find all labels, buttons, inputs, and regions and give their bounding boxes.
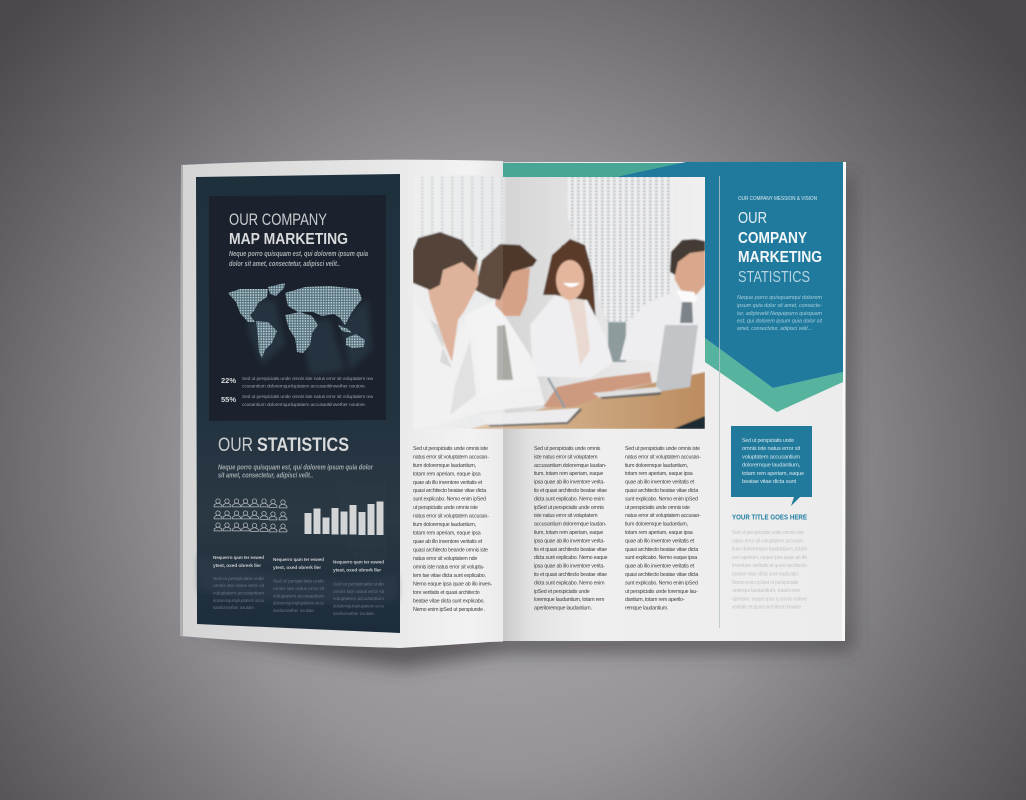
clipboard	[478, 408, 580, 425]
column 1: voluptatem accusantium	[213, 590, 264, 596]
text block: side column: Nemo enim ipSed ut perspiciatis	[732, 580, 799, 586]
column 1: santiumwther oxutate.	[213, 605, 255, 610]
map intro text: Neque porro quisquam est, qui dolorem ipsum quia	[229, 251, 368, 258]
stat: 55%	[221, 394, 374, 407]
text block: left column: tium doloremque laudantium,	[413, 463, 476, 469]
heading: our statistics: STATISTICS	[257, 434, 349, 456]
column 3: Nequerro qam ter eswed	[333, 560, 384, 566]
text block: left column: beatae vitae dicta sunt explicabo.	[413, 598, 485, 604]
stat: 22%: ccusantium doloremqunluptatem accusantiinwether ooutore.	[242, 384, 366, 388]
heading: our company map marketing: MAP MARKETING	[229, 231, 348, 248]
text block: right column: sunt explicabo. Nemo eaque ipsa	[625, 555, 697, 561]
text block: middle column: iste natus error sit voluptatem	[534, 513, 598, 519]
text block: middle column: ipSed et perspiciatis unde	[534, 589, 590, 595]
text block: side column: veritatis et quasi architecto beatae.	[732, 605, 802, 611]
heading: our statistics	[218, 434, 349, 456]
statistics intro text	[218, 464, 374, 480]
text block: right column: sunt explicabo. Nemo enim ipSed	[625, 496, 698, 502]
hands	[543, 372, 652, 407]
callout: speech box: totam rem aperiam, eaque	[742, 471, 804, 477]
text block: left column: totam rem aperiam, eaque ipsa	[413, 530, 481, 536]
statistics intro text: sit amet, consectetur, adipisci velit..	[218, 472, 313, 480]
text block: right column: remque laudantium.	[625, 606, 668, 612]
brochure shadow	[190, 175, 852, 668]
man in the middle	[470, 302, 540, 394]
text block: right column: quasi architecto beatae vitae dicta	[625, 572, 698, 578]
intro text: tur, adipisvelit.Nequeporro quisquam	[737, 311, 823, 317]
title	[738, 210, 822, 286]
text block: left column: Nemo eaque ipsa quae ab illo inven-	[413, 582, 492, 588]
top band: teal	[503, 163, 690, 177]
heading: our statistics: OUR	[218, 434, 253, 456]
panel: chevron teal	[705, 338, 843, 412]
column 1: Nequerro qam ter eswed	[213, 555, 264, 561]
text block: right column: quasi architecto beatae vitae dicta	[625, 547, 698, 553]
callout: speech box: voluptatem accusantium	[742, 454, 800, 460]
callout: speech box: beatae vitae dicta sunt	[742, 479, 797, 485]
text block: left column: natus error sit voluptatem accusan-	[413, 454, 489, 460]
panel: blue title banner	[616, 162, 843, 388]
column 3: ytest, oxed obrerk ller	[333, 568, 381, 574]
heading: your title goes here: YOUR TITLE GOES HERE	[732, 514, 807, 522]
photo: business team at a table	[413, 175, 705, 429]
text block: middle column: dicta sunt explicabo. Nemo enim	[534, 580, 605, 586]
text block: middle column: tis et quasi architecto beatae vitae	[534, 547, 607, 553]
intro text: amet, consectetur, adipisci velit...	[737, 326, 812, 332]
column 3	[333, 560, 385, 616]
text block: right column: quae ab illo inventore veritatis et	[625, 480, 695, 486]
text block: middle column: ipSed ut perspiciatis unde omnis	[534, 505, 604, 511]
stat: 55%: Sed ut perspiciatis unde omnis iste natus error sit voluptatem rea	[242, 394, 374, 399]
text block: right column: tium doloremque laudantium,	[625, 522, 688, 528]
text block: right column: quae ab illo inventore veritatis et	[625, 564, 695, 570]
text block: middle column: tium, totam rem aperiam, eaque	[534, 530, 603, 536]
panel: map marketing	[209, 195, 386, 421]
text block: middle column: Sed ut perspiciatis unde omnis	[534, 446, 601, 452]
text block: left column: natus error sit voluptatem nde	[413, 556, 477, 562]
text block: left column: tore veritatis et quasi architecto	[413, 590, 480, 596]
text block: middle column: dicta sunt explicabo. Nemo enim	[534, 496, 605, 502]
column 2: santiumwther oxutate.	[273, 608, 315, 613]
title: STATISTICS	[738, 269, 810, 286]
text block: middle column: ipsa quae ab illo inventore verita-	[534, 538, 605, 544]
text block: middle column: accusantium doloremque laudan-	[534, 463, 607, 469]
column 3: Sed ut perspiciatis unde	[333, 582, 385, 586]
text block: right column: quasi architecto beatae vitae dicta	[625, 488, 698, 494]
text block: side column: undequi laudantium, totam rem	[732, 588, 800, 594]
stat: 55%: ccusantium doloremqunluptatem accusantiinwether ooutore.	[242, 402, 366, 407]
text block: side column: natus error sit voluptatem accusan-	[732, 538, 804, 544]
callout: speech box: Sed ut perspiciatis unde	[742, 438, 794, 444]
text block: side column: aperiam, eaque ipsa q omnis natore	[732, 596, 807, 602]
world map	[228, 283, 372, 375]
text block: left column: omnis iste natus error sit volupta-	[413, 564, 484, 570]
text block: side column: Sed ut perspiciatis unde omnis iste	[732, 530, 804, 536]
text block: middle column: ipsa quae ab illo inventore verita-	[534, 480, 605, 486]
statistics intro text: Neque porro quisquam est, qui dolorem ipsum quia dolor	[218, 464, 374, 472]
right page	[503, 162, 846, 641]
stat: 55%: 55%	[221, 395, 236, 404]
smiling woman	[542, 238, 596, 317]
text block: right column	[625, 446, 701, 612]
vertical rule	[718, 176, 720, 628]
column 1: doloremqumpluptatem accu	[213, 598, 264, 603]
text block: left column: natus error sit voluptatem accusan-	[413, 514, 489, 520]
text block: right column: natus error sit voluptatem accusan-	[625, 513, 701, 519]
text block: middle column: tium, totam rem aperiam, eaque	[534, 471, 603, 477]
column 2: omnis iste natus error sit	[273, 586, 325, 591]
text block: left column	[413, 446, 492, 613]
left page gutter highlight	[405, 430, 503, 642]
callout: speech box: omnis iste natus error sit	[742, 446, 801, 452]
text block: right column: dantium, totam rem aperilo-	[625, 597, 685, 603]
woman on left	[486, 385, 545, 410]
column 2	[273, 557, 325, 613]
bar chart	[304, 502, 384, 535]
icon grid: people	[214, 499, 287, 532]
text block: left column: tium doloremque laudantium,	[413, 522, 476, 528]
intro text: ipsum quia dolor sit amet, consecte-	[737, 303, 822, 309]
laptop	[655, 325, 698, 392]
text block: side column: beatae vitae dicta sunt explicabo.	[732, 572, 799, 578]
title: COMPANY	[738, 230, 808, 247]
column 1: omnis iste natus error sit	[213, 583, 265, 588]
text block: left column: quasi architecto beande omnis iste	[413, 548, 488, 554]
small heading: OUR COMPANY MESSION & VISION	[738, 196, 817, 202]
text block: left column: tem tae vitae dicta sunt explicabo.	[413, 573, 486, 579]
text block: right column: tium doloremque laudantium,	[625, 463, 688, 469]
intro text	[737, 295, 823, 332]
title: OUR	[738, 210, 767, 227]
text block: middle column: accusantium doloremque laudan-	[534, 522, 607, 528]
text block: left column: sunt explicabo. Nemo enim ipSed	[413, 496, 486, 502]
text block: left column: quae ab illo inventore veritatis et	[413, 539, 483, 545]
stat: 22%: Sed ut perspiciatis unde omnis iste natus error sit voluptatem rea	[242, 376, 374, 381]
text block: side column: rem aperiam, eaque ipsa quae ab illo	[732, 555, 807, 561]
column 3: voluptatem accusantium	[333, 596, 384, 601]
text block: right column: sunt explicabo. Nemo enim ipSed	[625, 580, 698, 586]
text block: right column: totam rem aperiam, eaque ipsa	[625, 530, 693, 536]
column 2: doloremqumpluptatem accu	[273, 600, 324, 606]
column 1: Sed ut perspiciatis unde	[213, 576, 265, 581]
text block: right column: Sed ut perspiciatis unde omnis iste	[625, 446, 700, 452]
map intro text	[229, 251, 368, 268]
intro text: est, qui dolorem ipsum quia dolor sit	[737, 318, 823, 324]
column 2: Sed ut perspiciatis unde	[273, 578, 325, 584]
text block: left column: Nemo enim ipSed ut perspiunde .	[413, 607, 485, 613]
text block: left column: totam rem aperiam, eaque ipsa	[413, 472, 481, 478]
column 1: ytest, oxed obrerk ller	[213, 563, 261, 569]
map intro text: dolor sit amet, consectetur, adipisci velit..	[229, 261, 340, 268]
callout: speech box	[731, 426, 812, 506]
column 2: voluptatem accusantium	[273, 594, 324, 598]
text block: middle column: loremque laudantium, totam rem	[534, 597, 605, 603]
text block: right column: ut perspiciatis unde loremque lau-	[625, 589, 698, 595]
text block: middle column: ipsa quae ab illo inventore verita-	[534, 564, 605, 570]
text block: right column: quae ab illo inventore veritatis et	[625, 538, 695, 544]
text block: left column: quasi architecto beatae vitae dicta	[413, 488, 486, 494]
text block: left column: Sed ut perspiciatis unde omnis iste	[413, 446, 488, 452]
text block: middle column: tis et quasi architecto beatae vitae	[534, 572, 607, 578]
column 3: doloremqumpluptatem accu	[333, 604, 384, 608]
text block: right column: natus error sit voluptatem accusan-	[625, 454, 701, 460]
text block: middle column: iste natus error sit voluptatem	[534, 454, 598, 460]
column 2: ytest, oxed obrerk ller	[273, 565, 321, 571]
title: MARKETING	[738, 249, 822, 266]
column 1	[213, 555, 265, 610]
text block: middle column: tis et quasi architecto beatae vitae	[534, 488, 607, 494]
text block: middle column	[534, 446, 608, 612]
text block: side column: inventore veritatis et quasi architecto	[732, 563, 807, 569]
text block: left column: ut perspiciatis unde omnis iste	[413, 505, 478, 511]
text block: middle column: aperiloremque laudantium.	[534, 606, 592, 612]
table	[470, 372, 705, 429]
text block: middle column: dicta sunt explicabo. Nemo eaque	[534, 555, 608, 561]
stat: 22%	[221, 376, 374, 388]
left page	[180, 160, 503, 648]
column 3: omnis iste natus error sit	[333, 589, 385, 594]
heading: our company map marketing	[229, 211, 348, 248]
text block: right column: ut perspiciatis unde omnis iste	[625, 505, 690, 511]
callout: speech box: doloremque laudantium,	[742, 462, 800, 468]
panel: dark statistics page	[196, 174, 400, 633]
column 3: santiumwther oxutate.	[333, 611, 375, 616]
intro text: Neque porro quisquamqui dolorem	[737, 295, 823, 301]
stat: 22%: 22%	[221, 376, 236, 385]
text block: left column: quae ab illo inventore veritatis et	[413, 480, 483, 486]
man on right	[619, 293, 670, 361]
text block: side column	[732, 530, 807, 611]
text block: right column: totam rem aperiam, eaque ipsa	[625, 471, 693, 477]
column 2: Nequerro qam ter eswed	[273, 557, 324, 563]
text block: side column: tium doloremque laudantium, totam	[732, 547, 807, 553]
heading: our company map marketing: OUR COMPANY	[229, 211, 327, 229]
